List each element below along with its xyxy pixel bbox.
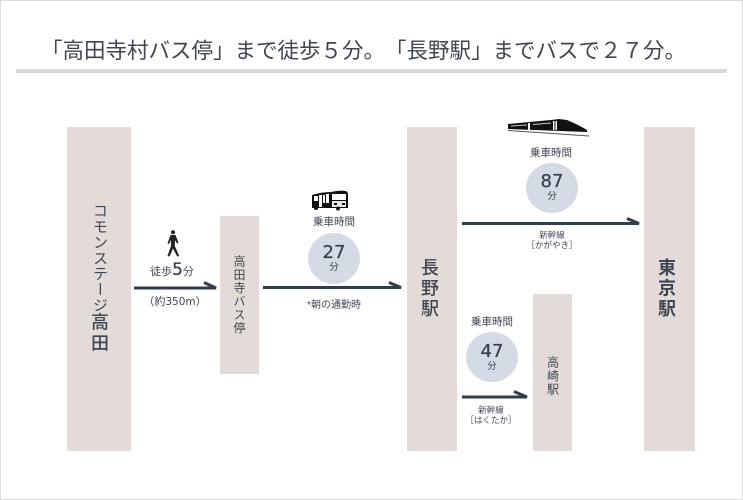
bus segment [263, 190, 402, 311]
station label: Takasaki station: 高崎駅 [546, 356, 560, 396]
icon: bus [312, 190, 348, 210]
unit: minutes: 分 [487, 361, 497, 372]
number: 87: 87 [541, 171, 563, 192]
number: 47: 47 [481, 341, 503, 362]
label: ride time: 乗車時間 [313, 216, 355, 228]
title underline [16, 69, 727, 73]
arrow: Hakutaka [462, 390, 528, 398]
icon: walking person [168, 230, 180, 256]
number: 27: 27 [323, 242, 345, 263]
walking segment [134, 230, 217, 308]
station label: Commons Stage Takada: コモンステージ 高田 [89, 203, 109, 355]
panel: Takadaji bus stop [220, 216, 259, 374]
badge: 87 minutes [526, 163, 578, 213]
label: Kagayaki service: ［かがやき］ [526, 240, 578, 250]
icon: bullet train [508, 119, 589, 136]
label: Kagayaki service [526, 230, 578, 250]
walk time label: 徒歩5分 [150, 260, 194, 280]
title: 「高田寺村バス停」まで徒歩５分。「長野駅」までバスで２７分。 [41, 39, 686, 63]
label: ride time: 乗車時間 [471, 316, 513, 328]
station label: Takadaji bus stop: 高田寺バス停 [232, 255, 246, 335]
label: Hakutaka service [465, 405, 516, 425]
panel: Tokyo station [644, 127, 695, 451]
panel: Commons Stage Takada [67, 127, 131, 451]
note: morning commute: *朝の通勤時 [307, 300, 361, 311]
label: Hakutaka service: 新幹線 [478, 405, 504, 415]
station label: Tokyo station: 東京駅 [656, 258, 676, 320]
label: Kagayaki service: 新幹線 [539, 230, 565, 240]
label: Hakutaka service: ［はくたか］ [465, 415, 516, 425]
arrow: bus [263, 281, 402, 289]
badge: 47 minutes [466, 332, 518, 382]
panel: Takasaki station [533, 294, 572, 451]
unit: minutes: 分 [547, 191, 557, 202]
Shinkansen Kagayaki segment [462, 119, 640, 250]
badge: 27 minutes [308, 233, 360, 284]
walk distance label: （約350m） [143, 296, 207, 308]
arrow: walk [134, 281, 217, 290]
unit: minutes: 分 [329, 262, 339, 273]
label: ride time: 乗車時間 [530, 147, 572, 159]
Shinkansen Hakutaka segment [462, 316, 528, 425]
panel: Nagano station [407, 127, 457, 451]
station label: Nagano station: 長野駅 [419, 258, 439, 320]
arrow: Kagayaki [462, 217, 640, 225]
